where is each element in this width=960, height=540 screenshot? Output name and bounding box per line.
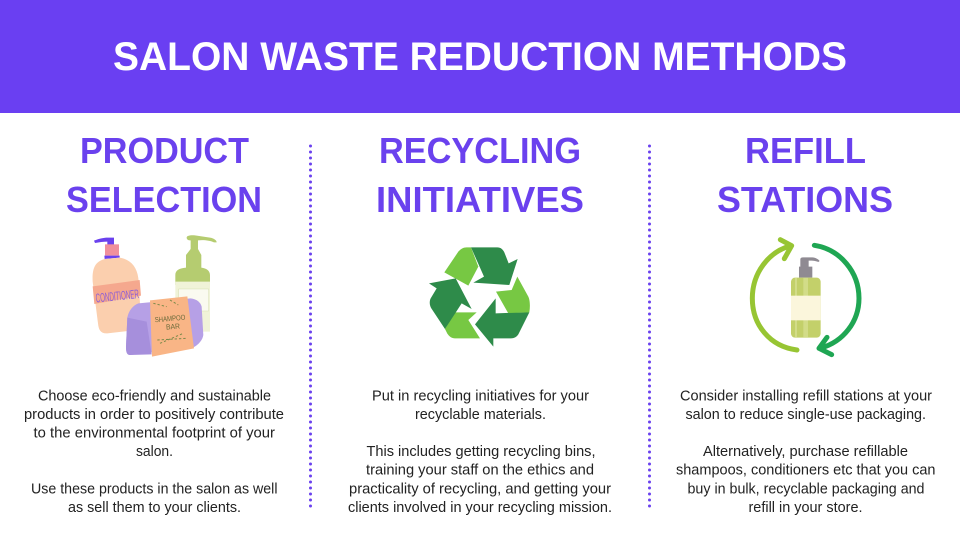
heading: product selection — [66, 130, 262, 220]
title: SALON WASTE REDUCTION METHODS — [113, 35, 847, 79]
text block: recycling initiatives: clients involved in your recycling mission. — [348, 500, 612, 516]
heading: product selection: PRODUCT — [80, 130, 249, 171]
panel: product selection — [24, 130, 284, 516]
text block: product selection — [24, 388, 284, 516]
text block: recycling initiatives: Put in recycling initiatives for your — [372, 388, 589, 404]
text block: product selection: as sell them to your clients. — [68, 500, 241, 516]
text block: recycling initiatives: This includes getting recycling bins, — [366, 444, 596, 460]
icon: recycling symbol — [429, 247, 530, 347]
text block: recycling initiatives: training your staff on the ethics and — [366, 462, 594, 478]
text block: recycling initiatives: recyclable materials. — [415, 407, 546, 423]
panel: recycling initiatives — [348, 130, 612, 516]
icon: conditioner bottle, pump bottle and shampoo bar: SHAMPOO — [154, 313, 186, 324]
text block: refill stations: salon to reduce single-use packaging. — [686, 407, 926, 423]
heading: refill stations: STATIONS — [717, 179, 893, 220]
text block: refill stations — [676, 388, 936, 516]
text block: product selection: Use these products in the salon as well — [31, 482, 278, 498]
icon: conditioner bottle, pump bottle and shampoo bar: BAR — [166, 321, 180, 332]
heading: refill stations — [717, 130, 893, 220]
text block: refill stations: buy in bulk, recyclable packaging and — [688, 482, 924, 498]
heading: recycling initiatives: INITIATIVES — [376, 179, 584, 220]
text block: refill stations: Consider installing refill stations at your — [680, 388, 932, 404]
heading: refill stations: REFILL — [745, 130, 866, 171]
text block: product selection: products in order to positively contribute — [24, 407, 284, 423]
text block: product selection: to the environmental footprint of your — [34, 426, 275, 442]
header banner — [0, 0, 960, 113]
text block: product selection: Choose eco-friendly and sustainable — [38, 388, 271, 404]
heading: recycling initiatives: RECYCLING — [379, 130, 581, 171]
icon: conditioner bottle, pump bottle and shampoo bar: CONDITIONER — [95, 287, 140, 306]
icon: conditioner bottle, pump bottle and shampoo bar — [93, 235, 217, 357]
text block: product selection: salon. — [136, 444, 173, 460]
text block: recycling initiatives: practicality of recycling, and getting your — [349, 482, 611, 498]
icon: refill bottle with circular arrows — [752, 240, 859, 355]
heading: product selection: SELECTION — [66, 179, 262, 220]
text block: refill stations: refill in your store. — [748, 500, 862, 516]
heading: recycling initiatives — [376, 130, 584, 220]
panel: refill stations — [676, 130, 936, 516]
text block: recycling initiatives — [348, 388, 612, 516]
text block: refill stations: Alternatively, purchase refillable — [703, 444, 908, 460]
text block: refill stations: shampoos, conditioners etc that you can — [676, 462, 936, 478]
